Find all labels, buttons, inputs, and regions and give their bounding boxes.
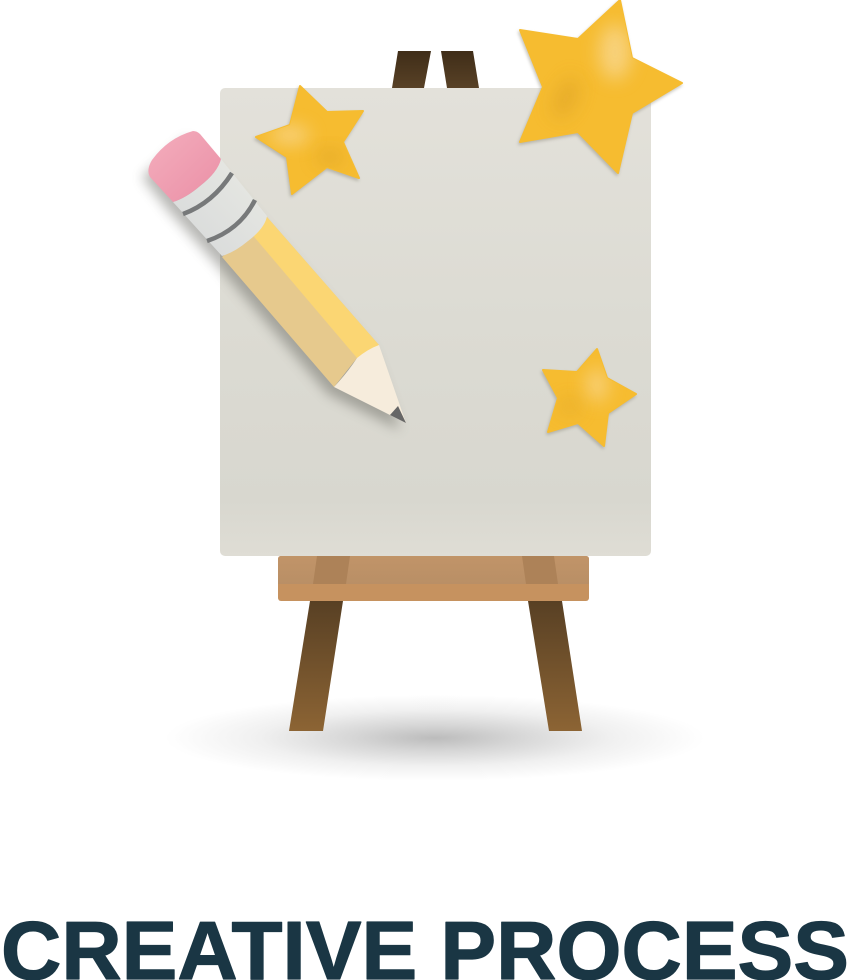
easel top posts	[392, 51, 479, 88]
pencil ferrule	[173, 159, 267, 256]
ground shadow	[165, 695, 705, 781]
pencil	[142, 131, 406, 430]
easel legs	[289, 601, 582, 731]
easel shelf	[278, 556, 589, 601]
pencil eraser	[148, 131, 221, 202]
canvas board	[220, 88, 651, 556]
pencil body	[222, 217, 379, 387]
star: small lower right	[542, 349, 636, 448]
pencil shadow	[142, 138, 400, 430]
pencil tip	[334, 345, 406, 423]
star: small upper left	[255, 86, 363, 196]
star: large upper right	[519, 0, 682, 175]
